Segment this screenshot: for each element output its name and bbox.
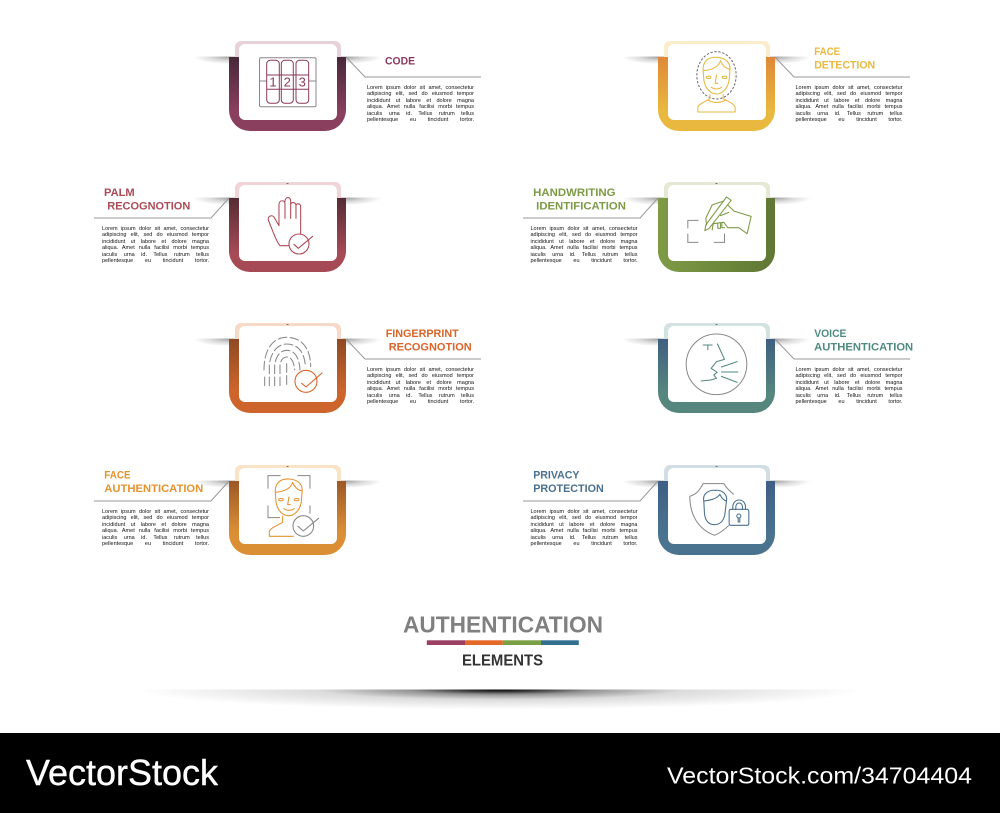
body text: iaculis urna id. Tellus rutrum tellus xyxy=(796,111,902,117)
body text: incididunt ut labore et dolore magna xyxy=(367,380,474,386)
body text: incididunt ut labore et dolore magna xyxy=(102,239,209,245)
card and icon: code xyxy=(198,41,481,131)
card and icon: palm recognition xyxy=(94,182,378,272)
body text xyxy=(367,367,474,405)
panel: handwriting identification xyxy=(523,182,806,272)
body text: pellentesque eu tincidunt tortor. xyxy=(796,117,902,123)
body text: iaculis urna id. Tellus rutrum tellus xyxy=(530,252,638,258)
body text: Lorem ipsum dolor sit amet, consectetur xyxy=(530,226,638,232)
body text: aliqua. Amet nulla facilisi morbi tempus xyxy=(102,245,209,251)
body text: aliqua. Amet nulla facilisi morbi tempus xyxy=(796,104,902,110)
card and icon: face authentication xyxy=(94,465,378,555)
body text: Lorem ipsum dolor sit amet, consectetur xyxy=(530,509,638,515)
body text: Lorem ipsum dolor sit amet, consectetur xyxy=(102,226,209,232)
body text: Lorem ipsum dolor sit amet, consectetur xyxy=(796,85,902,91)
body text: Lorem ipsum dolor sit amet, consectetur xyxy=(796,367,902,373)
colour bar xyxy=(427,640,579,645)
body text xyxy=(102,509,209,547)
body text: adipiscing elit, sed do eiusmod tempor xyxy=(530,232,638,238)
heading: handwriting identification: IDENTIFICATION xyxy=(536,200,625,212)
body text: incididunt ut labore et dolore magna xyxy=(796,380,902,386)
body text: iaculis urna id. Tellus rutrum tellus xyxy=(796,393,902,399)
body text: incididunt ut labore et dolore magna xyxy=(530,522,638,528)
card and icon: face detection xyxy=(626,41,910,131)
body text: pellentesque eu tincidunt tortor. xyxy=(530,541,638,547)
ground shadow xyxy=(135,690,865,710)
heading: face detection: FACE xyxy=(814,46,840,58)
body text: Lorem ipsum dolor sit amet, consectetur xyxy=(102,509,209,515)
panel: face detection xyxy=(626,41,910,131)
body text: Lorem ipsum dolor sit amet, consectetur xyxy=(367,367,474,373)
icon: number code lock xyxy=(260,58,316,107)
footer bar: VectorStock xyxy=(26,752,219,793)
icon: speaking face in circle xyxy=(686,334,746,395)
icon: shield with face and padlock xyxy=(689,484,748,535)
body text: adipiscing elit, sed do eiusmod tempor xyxy=(367,91,474,97)
card and icon: fingerprint recognition xyxy=(198,323,481,413)
body text xyxy=(530,226,638,264)
heading: fingerprint recognition: FINGERPRINT xyxy=(386,328,459,340)
panel: fingerprint recognition xyxy=(198,323,481,413)
panel: face authentication xyxy=(94,465,378,555)
heading: fingerprint recognition xyxy=(386,328,472,353)
body text: Lorem ipsum dolor sit amet, consectetur xyxy=(367,85,474,91)
body text: incididunt ut labore et dolore magna xyxy=(796,98,902,104)
card and icon: handwriting identification xyxy=(523,182,806,272)
heading: voice authentication: VOICE xyxy=(814,328,846,340)
body text: pellentesque eu tincidunt tortor. xyxy=(102,258,209,264)
panel: privacy protection xyxy=(523,465,806,555)
heading: handwriting identification: HANDWRITING xyxy=(533,187,615,199)
body text: aliqua. Amet nulla facilisi morbi tempus xyxy=(102,528,209,534)
title: authentication: AUTHENTICATION xyxy=(403,612,603,638)
body text: aliqua. Amet nulla facilisi morbi tempus xyxy=(367,104,474,110)
panel: voice authentication xyxy=(626,323,913,413)
panel: code xyxy=(198,41,481,131)
panel: palm recognition xyxy=(94,182,378,272)
heading: privacy protection: PROTECTION xyxy=(533,483,603,495)
body text xyxy=(367,85,474,123)
heading: face detection xyxy=(814,46,875,71)
body text: aliqua. Amet nulla facilisi morbi tempus xyxy=(530,528,638,534)
icon: framed face with check xyxy=(268,476,319,536)
body text xyxy=(530,509,638,547)
body text: aliqua. Amet nulla facilisi morbi tempus xyxy=(796,386,902,392)
card and icon: privacy protection xyxy=(523,465,806,555)
body text: adipiscing elit, sed do eiusmod tempor xyxy=(367,373,474,379)
body text: aliqua. Amet nulla facilisi morbi tempus xyxy=(530,245,638,251)
heading: palm recognition xyxy=(104,187,190,212)
heading: face authentication: AUTHENTICATION xyxy=(104,483,203,495)
icon: fingerprint with check xyxy=(264,337,322,392)
icon: number code lock: 1 xyxy=(269,74,277,90)
icon: number code lock: 3 xyxy=(299,74,306,90)
body text: aliqua. Amet nulla facilisi morbi tempus xyxy=(367,386,474,392)
subtitle: elements: ELEMENTS xyxy=(462,652,543,669)
heading: face authentication xyxy=(104,470,203,495)
icon: number code lock: 2 xyxy=(284,74,291,90)
heading: handwriting identification xyxy=(533,187,625,212)
body text: adipiscing elit, sed do eiusmod tempor xyxy=(796,91,902,97)
heading: fingerprint recognition: RECOGNOTION xyxy=(389,341,472,353)
heading: face authentication: FACE xyxy=(104,470,131,482)
icon: palm with check xyxy=(268,198,313,254)
body text xyxy=(796,367,902,405)
body text: pellentesque eu tincidunt tortor. xyxy=(367,117,474,123)
body text: incididunt ut labore et dolore magna xyxy=(102,522,209,528)
body text: incididunt ut labore et dolore magna xyxy=(530,239,638,245)
heading: voice authentication xyxy=(814,328,913,353)
body text: pellentesque eu tincidunt tortor. xyxy=(796,399,902,405)
body text: iaculis urna id. Tellus rutrum tellus xyxy=(102,535,209,541)
body text: pellentesque eu tincidunt tortor. xyxy=(367,399,474,405)
body text xyxy=(102,226,209,264)
heading: privacy protection: PRIVACY xyxy=(533,470,580,482)
icon: hand writing with pen xyxy=(687,197,751,242)
heading: code: CODE xyxy=(385,55,415,67)
body text: adipiscing elit, sed do eiusmod tempor xyxy=(796,373,902,379)
body text: pellentesque eu tincidunt tortor. xyxy=(530,258,638,264)
body text: iaculis urna id. Tellus rutrum tellus xyxy=(102,252,209,258)
body text: adipiscing elit, sed do eiusmod tempor xyxy=(102,515,209,521)
footer bar: VectorStock.com/34704404 xyxy=(667,762,972,788)
body text xyxy=(796,85,902,123)
body text: adipiscing elit, sed do eiusmod tempor xyxy=(102,232,209,238)
card and icon: voice authentication xyxy=(626,323,913,413)
body text: iaculis urna id. Tellus rutrum tellus xyxy=(367,393,474,399)
body text: iaculis urna id. Tellus rutrum tellus xyxy=(530,535,638,541)
heading: voice authentication: AUTHENTICATION xyxy=(814,341,913,353)
body text: adipiscing elit, sed do eiusmod tempor xyxy=(530,515,638,521)
footer bar xyxy=(0,733,1000,813)
heading: palm recognition: RECOGNOTION xyxy=(107,200,190,212)
heading: face detection: DETECTION xyxy=(814,59,875,71)
body text: incididunt ut labore et dolore magna xyxy=(367,98,474,104)
body text: pellentesque eu tincidunt tortor. xyxy=(102,541,209,547)
heading: palm recognition: PALM xyxy=(104,187,135,199)
heading: privacy protection xyxy=(533,470,603,495)
icon: face in dashed oval xyxy=(696,52,736,112)
body text: iaculis urna id. Tellus rutrum tellus xyxy=(367,111,474,117)
